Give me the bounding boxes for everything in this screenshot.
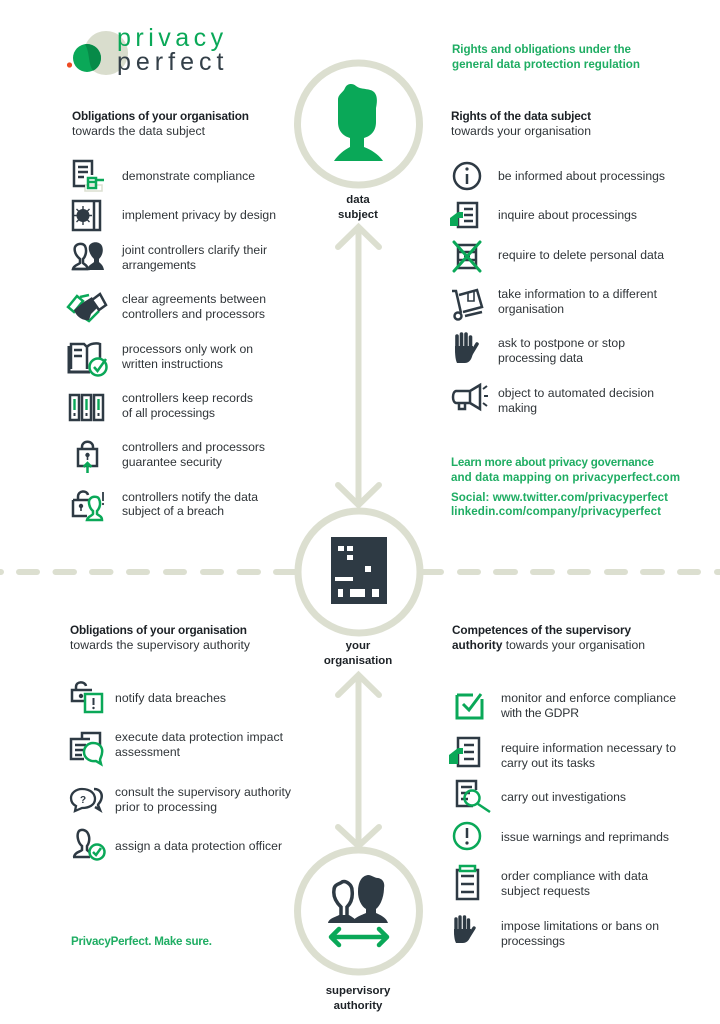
heading: competences of supervisory authority: Competences of the supervisory [452, 623, 631, 637]
label: your organisation [324, 640, 392, 667]
node: supervisory authority [298, 850, 420, 972]
icon: document with green arrow [449, 738, 479, 766]
title: rights and obligations: Rights and obligations under the [452, 43, 632, 56]
item: monitor: monitor and enforce compliance [501, 691, 676, 705]
heading: obligations towards data subject: towards the data subject [72, 124, 206, 138]
item: assign DPO: assign a data protection officer [115, 839, 282, 853]
icon: hand [455, 334, 477, 363]
item: impose limitations [454, 917, 659, 948]
item: require to delete: require to delete personal data [498, 248, 664, 262]
heading: obligations towards supervisory authority [70, 623, 251, 652]
icon: binders [70, 395, 103, 420]
panel: rights of the data subject [450, 163, 665, 415]
central arrow: organisation to supervisory authority [338, 675, 379, 846]
text block: learn more: Learn more about privacy governance [451, 456, 655, 469]
item: be informed: be informed about processings [498, 169, 665, 183]
item: require information: require information necessary to [501, 741, 676, 755]
text block: social links [451, 491, 668, 518]
text block: learn more [451, 456, 680, 484]
item: take information [452, 287, 658, 320]
icon: safe [73, 201, 100, 230]
heading: obligations towards data subject [72, 109, 249, 138]
text block: social links: linkedin.com/company/privacyperfect [451, 505, 661, 518]
label: supervisory authority [326, 985, 391, 1012]
item: clear agreements: clear agreements between [122, 292, 266, 306]
label: your organisation: organisation [324, 655, 392, 667]
panel: competences of supervisory authority [449, 691, 676, 948]
heading: obligations towards supervisory authority: Obligations of your organisation [70, 623, 247, 637]
item: postpone [455, 334, 625, 365]
icon: document with green arrow [450, 203, 477, 227]
item: take information: take information to a different [498, 287, 658, 301]
item: clear agreements: controllers and processors [122, 307, 265, 321]
item: investigations [457, 781, 626, 812]
label: data subject [338, 194, 378, 221]
title: rights and obligations [452, 43, 640, 71]
icon: megaphone [453, 385, 488, 409]
node: your organisation [298, 511, 420, 633]
icon: handshake [68, 294, 106, 321]
item: controllers keep records: of all processings [122, 406, 215, 420]
item: impact assessment [71, 730, 284, 764]
icon: speech bubbles with question: ? [80, 795, 86, 806]
label: supervisory authority: authority [334, 1000, 383, 1012]
icon: alert circle [454, 823, 480, 849]
item: notify data breaches [72, 682, 226, 712]
icon: two people with arrow [328, 875, 388, 945]
text block: learn more: and data mapping on privacyperfect.com [451, 471, 680, 484]
item: impose limitations: impose limitations or bans on [501, 919, 659, 933]
icon: book with check [69, 343, 106, 376]
icon: document with magnifier [457, 781, 490, 812]
icon: clipboard [457, 866, 478, 899]
item: clear agreements [68, 292, 266, 321]
label: your organisation: your [346, 640, 371, 652]
icon: crossed out box [454, 242, 480, 271]
item: joint controllers: arrangements [122, 258, 196, 272]
item: consult: prior to processing [115, 800, 217, 814]
item: object: object to automated decision [498, 386, 654, 400]
item: processors only work: processors only work on [122, 342, 253, 356]
heading: obligations towards data subject: Obligations of your organisation [72, 109, 249, 123]
item: object: making [498, 401, 537, 415]
icon: hand truck [452, 290, 482, 320]
icon: person [334, 84, 383, 161]
icon: documents with speech bubble [71, 733, 102, 764]
item: controllers and processors: controllers and processors [122, 440, 265, 454]
icon: open lock with person [73, 491, 104, 520]
item: warnings: issue warnings and reprimands [501, 830, 669, 844]
item: processors only work [69, 342, 253, 376]
item: joint controllers [72, 242, 267, 272]
item: order compliance: order compliance with data [501, 869, 648, 883]
icon: two heads [72, 242, 104, 270]
item: require information [449, 738, 676, 770]
item: consult [71, 785, 292, 814]
panel: obligations towards supervisory authority [71, 682, 292, 860]
item: investigations: carry out investigations [501, 790, 626, 804]
item: implement privacy by design: implement privacy by design [122, 208, 276, 222]
item: controllers keep records: controllers keep records [122, 391, 253, 405]
item: require information: carry out its tasks [501, 756, 595, 770]
item: controllers and processors: guarantee security [122, 455, 223, 469]
icon: info circle [454, 163, 480, 189]
heading: competences of supervisory authority [452, 623, 645, 652]
icon: padlock with arrow [78, 442, 97, 473]
icon: document with gavel [74, 161, 104, 191]
item: take information: organisation [498, 302, 564, 316]
central arrow: data subject to organisation [338, 227, 379, 505]
icon: hand [454, 917, 474, 943]
item: controllers keep records [70, 391, 253, 420]
icon: person with check [73, 830, 104, 860]
item: joint controllers: joint controllers clarify their [121, 243, 267, 257]
panel: obligations towards data subject [68, 161, 276, 520]
heading: rights of the data subject: towards your organisation [451, 124, 591, 138]
item: demonstrate compliance [74, 161, 255, 191]
text block: social links: Social: www.twitter.com/privacyperfect [451, 491, 668, 504]
icon: green checkbox [457, 694, 482, 718]
icon: lock with alert [72, 682, 102, 712]
logo: privacy [117, 24, 228, 52]
label: data subject: data [346, 194, 370, 206]
item: notify breach: subject of a breach [122, 504, 224, 518]
label: supervisory authority: supervisory [326, 985, 391, 997]
item: notify breach [73, 490, 258, 520]
heading: rights of the data subject [451, 109, 591, 138]
heading: rights of the data subject: Rights of the data subject [451, 109, 591, 123]
item: processors only work: written instructions [121, 357, 223, 371]
item: inquire: inquire about processings [498, 208, 637, 222]
item: warnings [454, 823, 669, 849]
item: postpone: processing data [498, 351, 583, 365]
item: object [453, 385, 654, 415]
logo [67, 24, 228, 76]
tagline: PrivacyPerfect. Make sure. [71, 935, 212, 948]
title: rights and obligations: general data protection regulation [452, 58, 640, 71]
item: monitor [457, 691, 676, 720]
item: order compliance: subject requests [501, 884, 590, 898]
dashed divider [0, 569, 720, 575]
item: inquire [450, 203, 637, 227]
item: order compliance [457, 866, 648, 899]
item: notify data breaches: notify data breaches [115, 691, 226, 705]
item: implement privacy by design [73, 201, 276, 230]
item: consult: consult the supervisory authority [115, 785, 292, 799]
logo: perfect [117, 48, 228, 76]
node: data subject [298, 63, 420, 185]
item: demonstrate compliance: demonstrate compliance [122, 169, 255, 183]
heading: competences of supervisory authority: authority towards your organisation [452, 638, 645, 652]
item: postpone: ask to postpone or stop [498, 336, 625, 350]
icon: speech bubbles with question [71, 789, 102, 811]
label: data subject: subject [338, 209, 378, 221]
heading: obligations towards supervisory authority: towards the supervisory authority [70, 638, 251, 652]
icon: building [331, 537, 387, 604]
item: notify breach: controllers notify the data [122, 490, 258, 504]
item: impose limitations: processings [501, 934, 565, 948]
item: be informed [454, 163, 665, 189]
item: controllers and processors [78, 440, 265, 473]
item: impact assessment: assessment [115, 745, 181, 759]
item: impact assessment: execute data protection impact [115, 730, 284, 744]
item: assign DPO [73, 830, 282, 860]
item: monitor: with the GDPR [500, 706, 579, 720]
item: require to delete [454, 242, 664, 271]
